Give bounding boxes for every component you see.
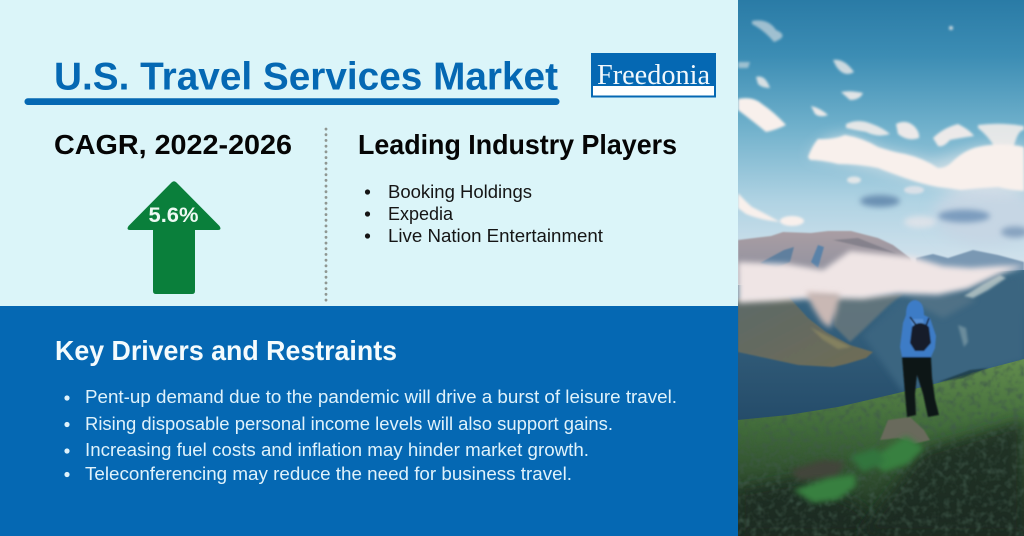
photo: hiker overlooking mountains xyxy=(738,0,1024,536)
panel: light header background xyxy=(0,0,738,306)
heading: key drivers and restraints: Key Drivers and Restraints xyxy=(55,335,397,366)
snowy mountain peaks xyxy=(738,231,918,285)
list: drivers and restraints: Increasing fuel costs and inflation may hinder market growth. xyxy=(85,439,589,460)
logo: Freedonia xyxy=(591,53,716,98)
icon: up arrow with growth rate xyxy=(128,181,220,294)
heading: CAGR: CAGR, 2022-2026 xyxy=(54,129,292,160)
list: drivers and restraints: Rising disposable personal income levels will also support gains. xyxy=(85,413,613,434)
title: U.S. Travel Services Market xyxy=(54,56,558,98)
panel: key drivers background xyxy=(0,306,738,536)
white clouds in the sky xyxy=(738,20,1024,226)
list: industry players: Expedia xyxy=(388,203,454,224)
icon: up arrow with growth rate: 5.6% xyxy=(148,203,198,227)
list: industry players: Live Nation Entertainment xyxy=(388,225,603,246)
list: drivers and restraints xyxy=(64,386,677,484)
hazy clouds at right of the sky xyxy=(860,185,1024,245)
dark valley and right mountain slope xyxy=(738,270,1024,430)
soft glow behind main clouds xyxy=(808,134,1024,192)
list: industry players xyxy=(365,181,603,246)
heading: leading industry players: Leading Industry Players xyxy=(358,129,677,160)
distant mountain ridge xyxy=(916,250,1024,285)
list: drivers and restraints: Pent-up demand due to the pandemic will drive a burst of leisure travel. xyxy=(85,386,677,407)
rocks and ferns xyxy=(791,417,930,503)
hiker in blue jacket xyxy=(900,300,939,417)
grassy hillside xyxy=(738,359,1024,536)
list: drivers and restraints: Teleconferencing may reduce the need for business travel. xyxy=(85,463,572,484)
logo: Freedonia: Freedonia xyxy=(597,59,710,91)
sunlit cloud band xyxy=(738,251,1024,328)
forested mountain at left xyxy=(738,296,873,367)
list: industry players: Booking Holdings xyxy=(388,181,532,202)
dotted divider xyxy=(325,129,327,305)
